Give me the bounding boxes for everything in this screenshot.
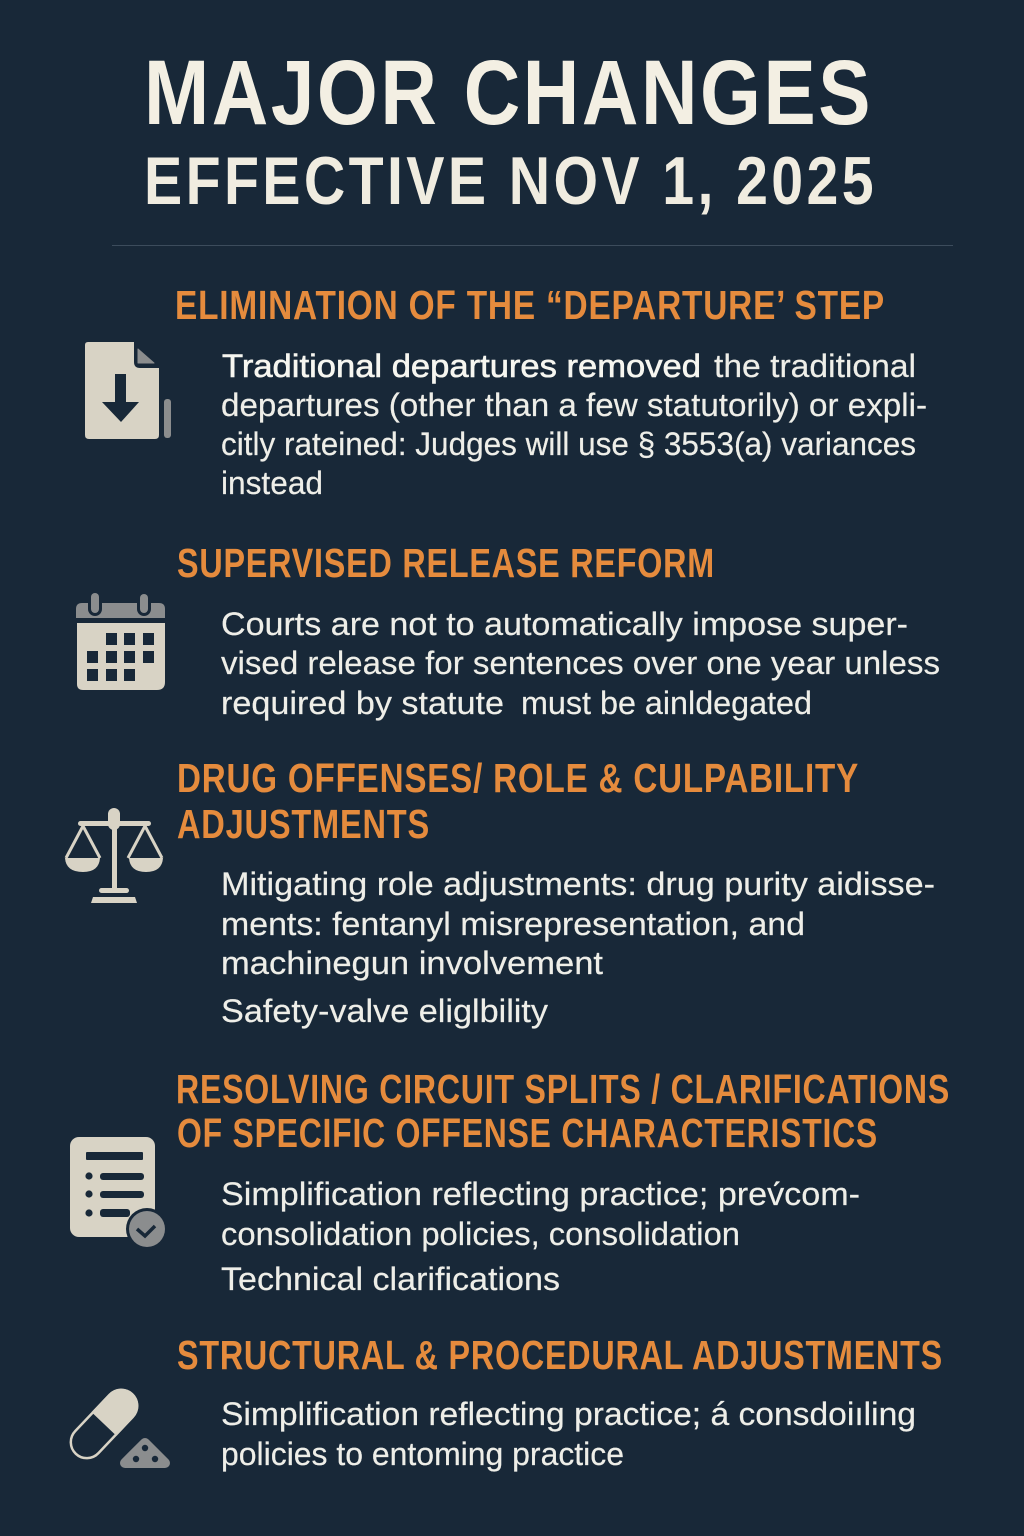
text block: structural adjustments xyxy=(221,1396,916,1472)
panel: structural and procedural adjustments xyxy=(63,1332,943,1472)
text block: departures: instead xyxy=(221,465,323,501)
heading: drug offenses, role and culpability: DRUG OFFENSES/ ROLE & CULPABILITY xyxy=(177,755,859,801)
text block: departures: the traditional xyxy=(714,348,916,384)
text block: supervised release: Courts are not to automatically impose super- xyxy=(221,606,908,642)
text block: departures xyxy=(221,348,927,501)
text block: structural adjustments: Simplification reflecting practice; á consdoiıling xyxy=(221,1396,916,1432)
text block: structural adjustments: policies to entoming practice xyxy=(221,1436,624,1472)
text block: drug offenses xyxy=(221,866,935,1029)
text block: supervised release: vised release for sentences over one year unless xyxy=(221,645,940,681)
icon: scales of justice xyxy=(65,808,163,903)
text block: departures: citly rateined: Judges will use § 3553(a) variances xyxy=(221,426,916,462)
text block: supervised release: required by statute xyxy=(221,685,504,721)
text block: drug offenses: Mitigating role adjustments: drug purity aidisse- xyxy=(221,866,935,902)
heading: resolving circuit splits xyxy=(176,1066,950,1156)
text block: supervised release: must be ainldegated xyxy=(521,685,812,721)
text block: circuit splits: Technical clarifications xyxy=(221,1261,560,1297)
panel: elimination of the departure step xyxy=(85,282,927,501)
text block: drug offenses: Safety-valve eliglbility xyxy=(221,993,548,1029)
icon: calendar xyxy=(76,591,165,690)
text block: circuit splits: Simplification reflecting practice; prev́com- xyxy=(221,1176,860,1212)
text block: departures: Traditional departures removed xyxy=(222,348,701,384)
heading: drug offenses, role and culpability: ADJUSTMENTS xyxy=(177,801,430,847)
title: MAJOR CHANGES xyxy=(144,42,873,144)
heading: elimination of the departure step: ELIMINATION OF THE “DEPARTURE’ STEP xyxy=(175,282,885,328)
panel: drug offenses xyxy=(65,755,935,1029)
text block: circuit splits xyxy=(221,1176,860,1297)
text block: drug offenses: machinegun involvement xyxy=(221,945,603,981)
panel: supervised release reform xyxy=(76,540,940,721)
heading: drug offenses, role and culpability xyxy=(177,755,859,847)
title xyxy=(144,42,877,219)
text block: circuit splits: consolidation policies, consolidation xyxy=(221,1216,740,1252)
text block: departures: departures (other than a few statutorily) or expli- xyxy=(221,387,927,423)
panel: resolving circuit splits xyxy=(70,1066,950,1297)
heading: supervised release reform: SUPERVISED RELEASE REFORM xyxy=(177,540,715,586)
text block: drug offenses: ments: fentanyl misrepresentation, and xyxy=(221,906,805,942)
title: EFFECTIVE NOV 1, 2025 xyxy=(144,143,877,219)
icon: checklist with check badge xyxy=(70,1137,168,1250)
icon: document with down arrow xyxy=(85,342,171,439)
icon: pill and tablet xyxy=(63,1382,165,1466)
text block: supervised release xyxy=(221,606,940,721)
